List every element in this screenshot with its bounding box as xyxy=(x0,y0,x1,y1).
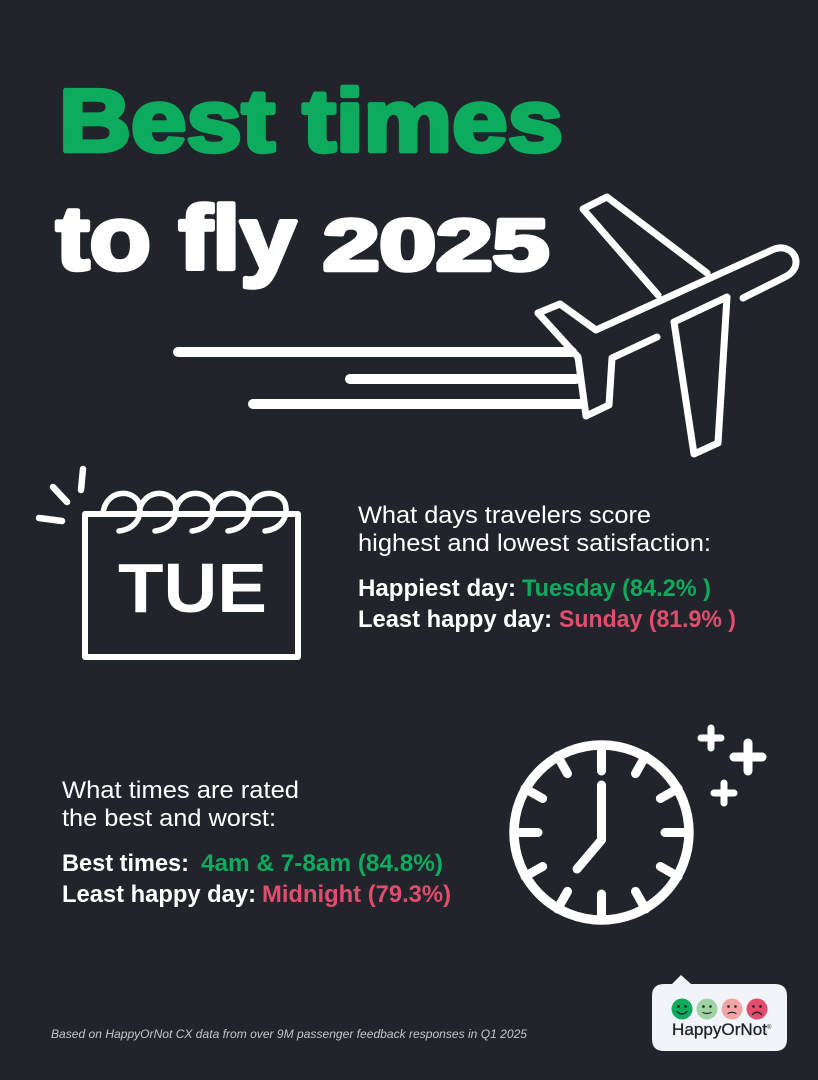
happiest day xyxy=(358,575,711,602)
days intro: highest and lowest satisfaction: xyxy=(358,530,711,557)
plane body xyxy=(538,197,796,454)
footnote: Based on HappyOrNot CX data from over 9M passenger feedback responses in Q1 2025 xyxy=(51,1027,527,1041)
text block: days xyxy=(358,502,736,633)
hour ticks xyxy=(517,748,686,917)
least happy time: Least happy day: xyxy=(62,881,256,908)
times intro xyxy=(62,777,299,832)
logo speech bubble xyxy=(652,975,787,1051)
title line: to fly 2025 xyxy=(56,189,549,289)
best times: 4am & 7-8am (84.8%) xyxy=(201,850,443,877)
logo: HappyOrNot xyxy=(652,975,787,1051)
happiest day: Tuesday (84.2% ) xyxy=(522,575,711,602)
least happy day: Least happy day: xyxy=(358,606,552,633)
clock face xyxy=(514,745,689,920)
text block: times xyxy=(62,777,451,908)
least happy day: Sunday (81.9% ) xyxy=(559,606,736,633)
times intro: What times are rated xyxy=(62,777,299,804)
spiral rings xyxy=(103,493,286,531)
best times xyxy=(62,850,443,877)
clock hands xyxy=(577,785,602,869)
smiley: very happy xyxy=(672,998,692,1020)
calendar label: TUE xyxy=(118,549,267,627)
title xyxy=(56,71,563,289)
least happy day xyxy=(358,606,736,633)
icon: airplane with speed lines xyxy=(178,197,796,454)
days intro xyxy=(358,502,711,557)
smiley: unhappy xyxy=(722,998,742,1020)
smiley: happy xyxy=(696,998,718,1020)
title line: to fly 2025: to fly xyxy=(56,189,296,289)
smiley: very unhappy xyxy=(746,998,768,1020)
icon: calendar showing Tuesday xyxy=(39,469,298,657)
icon: clock with sparkles xyxy=(514,728,762,920)
calendar page xyxy=(85,514,298,657)
best times: Best times: xyxy=(62,850,189,877)
logo wordmark: HappyOrNot xyxy=(672,1020,767,1039)
title line: to fly 2025: 2025 xyxy=(323,206,549,286)
happiest day: Happiest day: xyxy=(358,575,516,602)
least happy time: Midnight (79.3%) xyxy=(262,881,451,908)
attention marks xyxy=(39,469,83,521)
sparkle plus signs xyxy=(701,728,734,803)
least happy time xyxy=(62,881,451,908)
registered mark: ® xyxy=(767,1024,772,1031)
title line: Best times: Best times xyxy=(59,71,563,170)
days intro: What days travelers score xyxy=(358,502,651,529)
times intro: the best and worst: xyxy=(62,805,276,832)
speed lines xyxy=(178,352,580,404)
